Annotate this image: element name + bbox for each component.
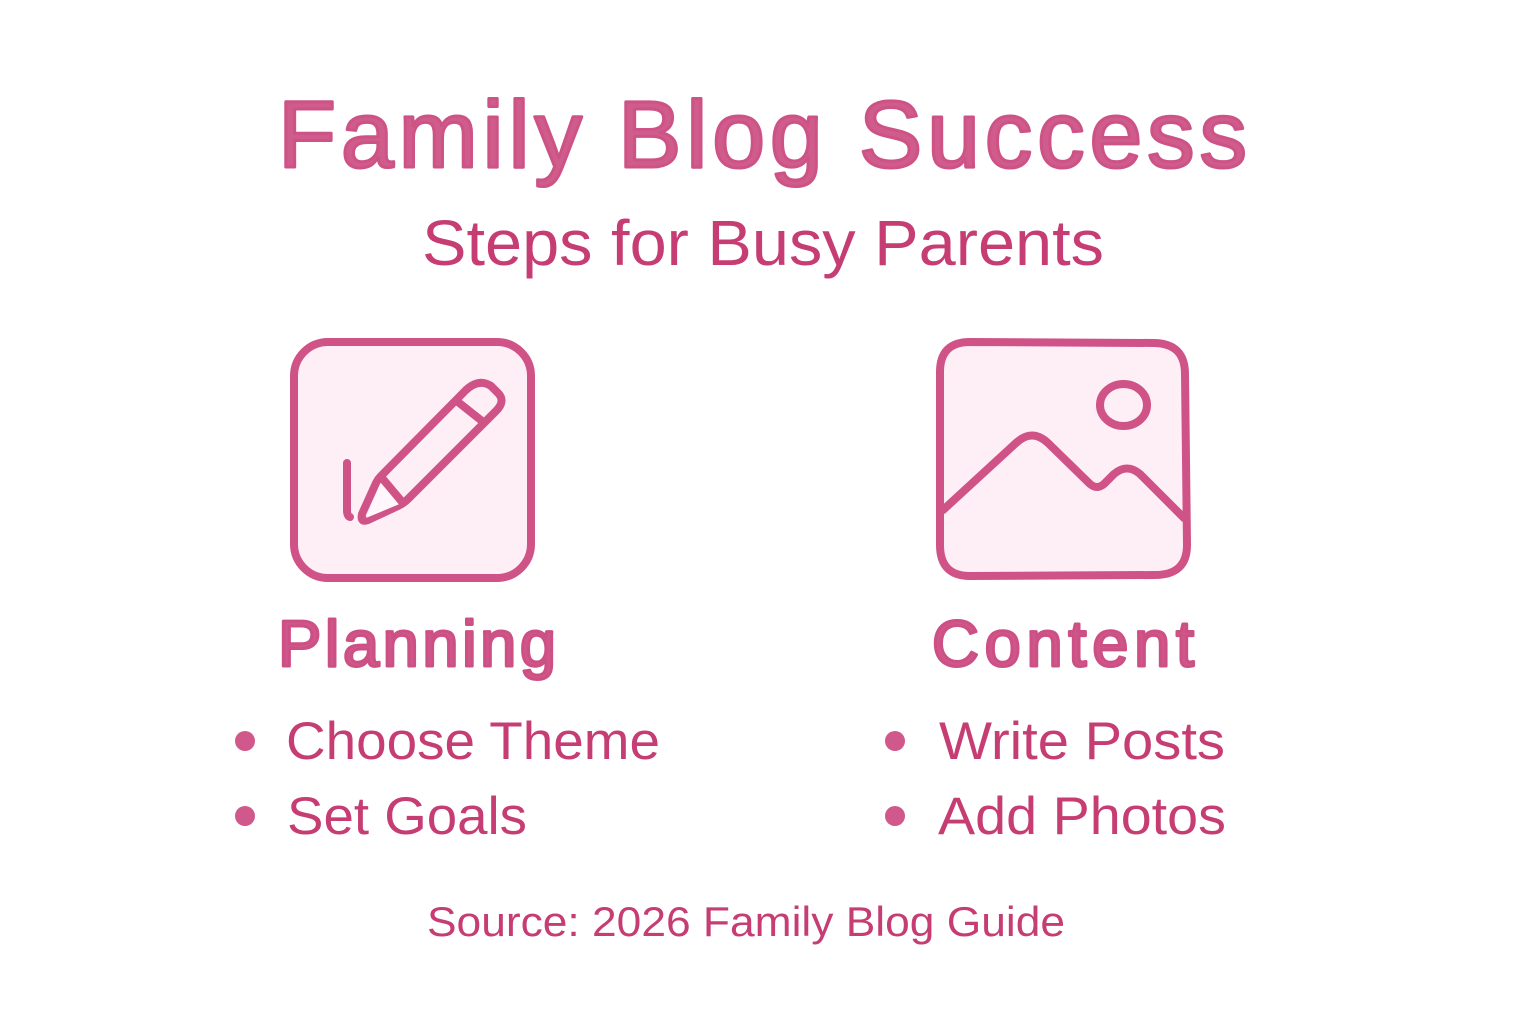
list: content: Add Photos — [938, 787, 1226, 846]
subtitle: Steps for Busy Parents — [422, 207, 1104, 279]
heading: content: Content — [932, 607, 1194, 680]
icon: image — [940, 342, 1187, 576]
title: Family Blog Success — [278, 82, 1247, 188]
list: planning: Set Goals — [287, 787, 527, 846]
panel: content — [885, 342, 1226, 846]
list: content — [885, 712, 1226, 846]
panel: planning — [235, 342, 660, 846]
list: content: Write Posts — [939, 712, 1225, 771]
list: planning — [235, 712, 660, 846]
icon: pencil — [294, 342, 531, 578]
source note: Source: 2026 Family Blog Guide — [427, 898, 1065, 945]
list: planning: Choose Theme — [286, 712, 660, 771]
heading: planning: Planning — [278, 607, 556, 680]
